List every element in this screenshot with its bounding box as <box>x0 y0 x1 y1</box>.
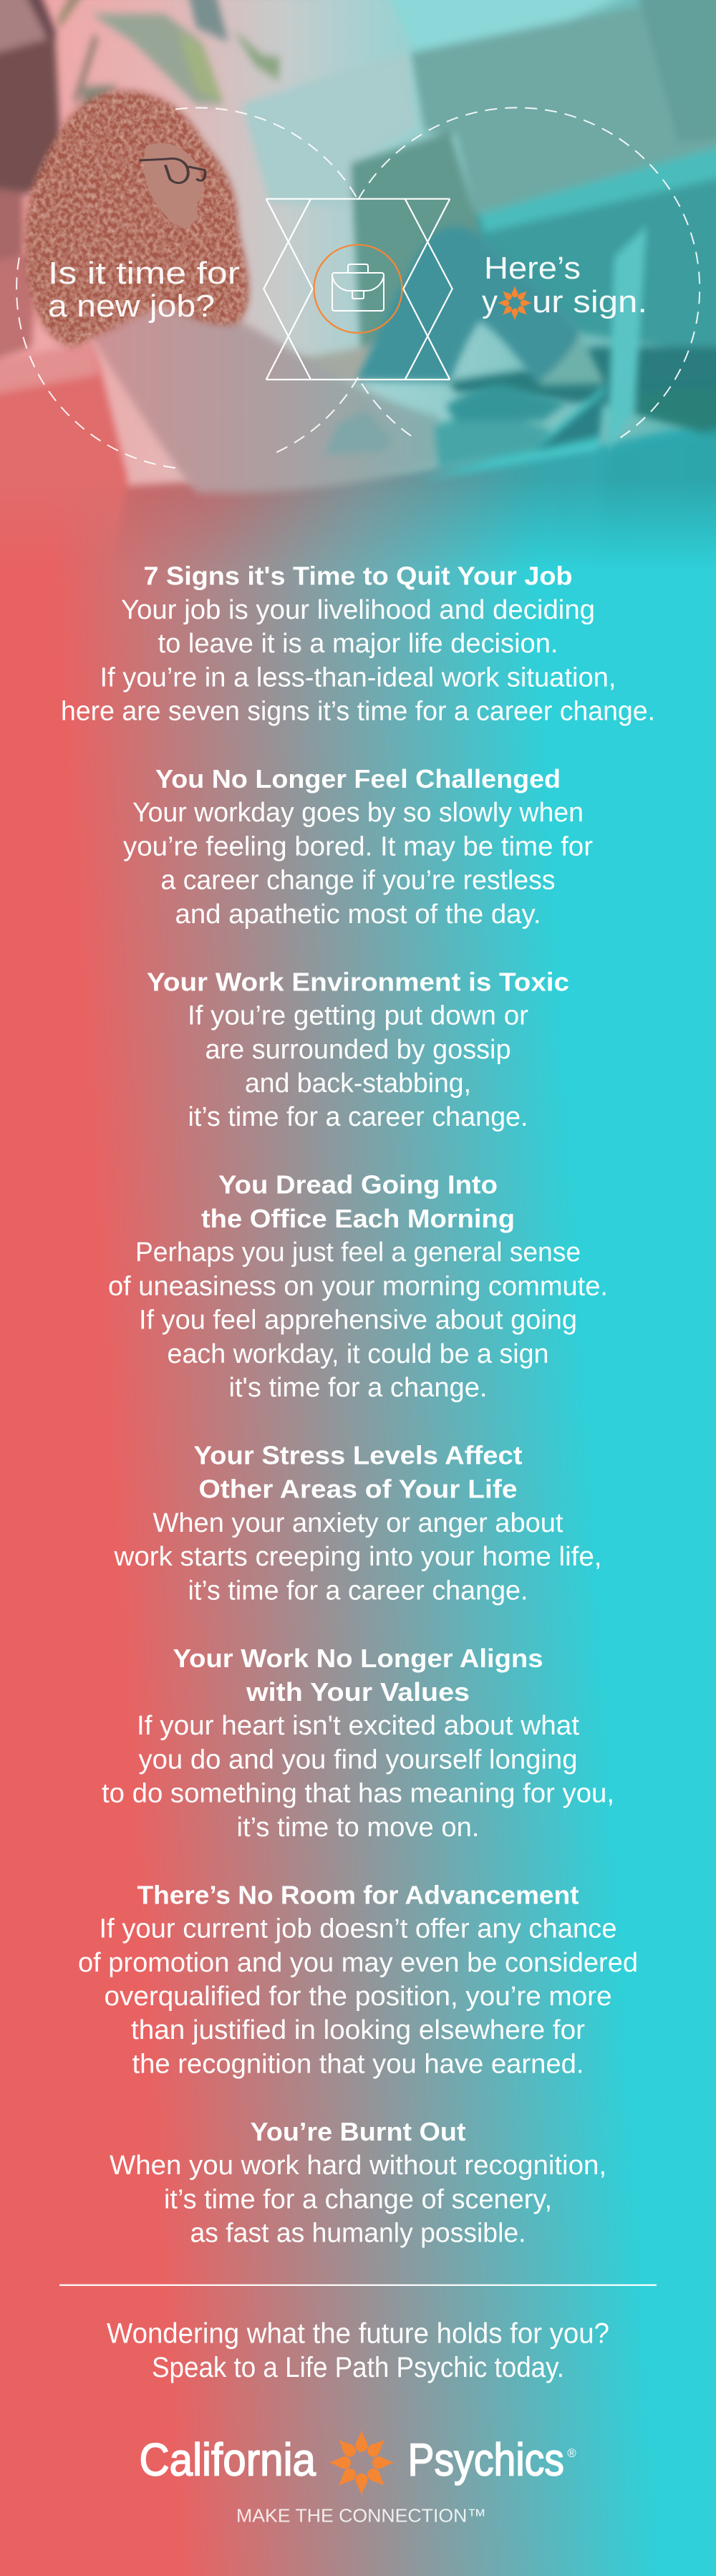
glasses <box>140 158 205 183</box>
sign 7: You’re Burnt Out <box>251 2117 465 2146</box>
sign 7: it’s time for a change of scenery, <box>164 2184 552 2214</box>
sign 4: When your anxiety or anger about <box>153 1508 563 1538</box>
sign 1: you’re feeling bored. It may be time for <box>123 831 593 862</box>
sign 2: are surrounded by gossip <box>205 1035 511 1065</box>
sign 5 <box>102 1644 614 1843</box>
sign 2: it’s time for a career change. <box>188 1102 528 1132</box>
sign 2: If you’re getting put down or <box>188 1001 528 1031</box>
geometric frame <box>263 199 453 380</box>
sign 5: it’s time to move on. <box>236 1813 480 1843</box>
hair <box>24 91 248 347</box>
icon: briefcase <box>332 264 384 311</box>
sign 3: the Office Each Morning <box>201 1204 515 1233</box>
sign 5: you do and you find yourself longing <box>139 1745 577 1775</box>
hero text right: ur sign. <box>532 284 647 319</box>
sign 1 <box>123 764 593 930</box>
icon: orange sun as letter o <box>498 286 532 320</box>
intro text block: If you’re in a less-than-ideal work situation, <box>100 662 616 693</box>
sign 5: If your heart isn't excited about what <box>137 1711 579 1741</box>
sign 1: Your workday goes by so slowly when <box>132 798 584 828</box>
hero text right: Here’s <box>484 251 581 286</box>
intro text block: here are seven signs it’s time for a career change. <box>61 697 655 727</box>
sign 7 <box>110 2117 606 2249</box>
sign 6: If your current job doesn’t offer any chance <box>99 1914 617 1944</box>
sign 3: it's time for a change. <box>229 1373 487 1403</box>
dashed circle right <box>358 107 700 440</box>
sign 6: than justified in looking elsewhere for <box>131 2015 585 2045</box>
logo: California Psychics <box>139 2430 576 2496</box>
subject: woman <box>20 85 716 503</box>
intro text block: 7 Signs it's Time to Quit Your Job <box>143 561 573 591</box>
sign 2 <box>147 967 569 1132</box>
face <box>144 143 205 229</box>
sign 3: Perhaps you just feel a general sense <box>135 1238 581 1268</box>
intro text block: Your job is your livelihood and deciding <box>121 595 595 625</box>
logo: California Psychics: Psychics <box>408 2434 564 2486</box>
sign 6: overqualified for the position, you’re more <box>105 1982 611 2012</box>
logo: California Psychics: California <box>139 2434 316 2486</box>
intro text block <box>61 561 655 727</box>
sign 5: Your Work No Longer Aligns <box>173 1644 543 1673</box>
sign 1: and apathetic most of the day. <box>175 899 541 930</box>
venn diagram with hourglass emblem <box>16 107 700 468</box>
sign 4: work starts creeping into your home life, <box>113 1542 602 1572</box>
sign 7: as fast as humanly possible. <box>190 2219 526 2249</box>
hero text right: y <box>482 284 498 319</box>
call to action: Wondering what the future holds for you? <box>107 2318 609 2350</box>
sign 1: a career change if you’re restless <box>160 866 556 896</box>
sign 4: Other Areas of Your Life <box>199 1475 517 1504</box>
sign 3: If you feel apprehensive about going <box>139 1306 577 1336</box>
sign 7: When you work hard without recognition, <box>110 2151 606 2181</box>
tagline: MAKE THE CONNECTION™ <box>236 2505 486 2527</box>
sign 4: Your Stress Levels Affect <box>193 1440 523 1470</box>
sign 6: the recognition that you have earned. <box>132 2049 584 2079</box>
call to action <box>107 2318 609 2383</box>
sign 5: with Your Values <box>246 1677 470 1707</box>
orange ring <box>314 245 402 333</box>
sign 3: each workday, it could be a sign <box>168 1339 548 1369</box>
icon: logo sun <box>329 2430 395 2496</box>
sign 6: of promotion and you may even be considered <box>78 1948 638 1978</box>
hero text left: Is it time for <box>48 256 240 291</box>
call to action: Speak to a Life Path Psychic today. <box>152 2352 564 2383</box>
sign 4: it’s time for a career change. <box>188 1576 528 1606</box>
sign 3 <box>108 1170 608 1403</box>
intro text block: to leave it is a major life decision. <box>158 629 558 659</box>
hero text left: a new job? <box>48 289 215 324</box>
sign 5: to do something that has meaning for you, <box>102 1779 614 1809</box>
dashed circle left <box>16 107 358 468</box>
hero text left <box>48 256 240 324</box>
hero photo: woman working on laptop with gradient tint <box>0 0 716 590</box>
sign 1: You No Longer Feel Challenged <box>155 764 561 793</box>
sign 2: Your Work Environment is Toxic <box>147 967 569 996</box>
logo: California Psychics: ® <box>567 2446 576 2460</box>
sign 3: You Dread Going Into <box>218 1170 498 1200</box>
sign 6: There’s No Room for Advancement <box>137 1880 579 1909</box>
sign 4 <box>113 1440 602 1606</box>
sign 6 <box>78 1880 638 2079</box>
hero text right <box>482 251 647 319</box>
sign 3: of uneasiness on your morning commute. <box>108 1271 608 1301</box>
sign 2: and back-stabbing, <box>245 1068 471 1099</box>
